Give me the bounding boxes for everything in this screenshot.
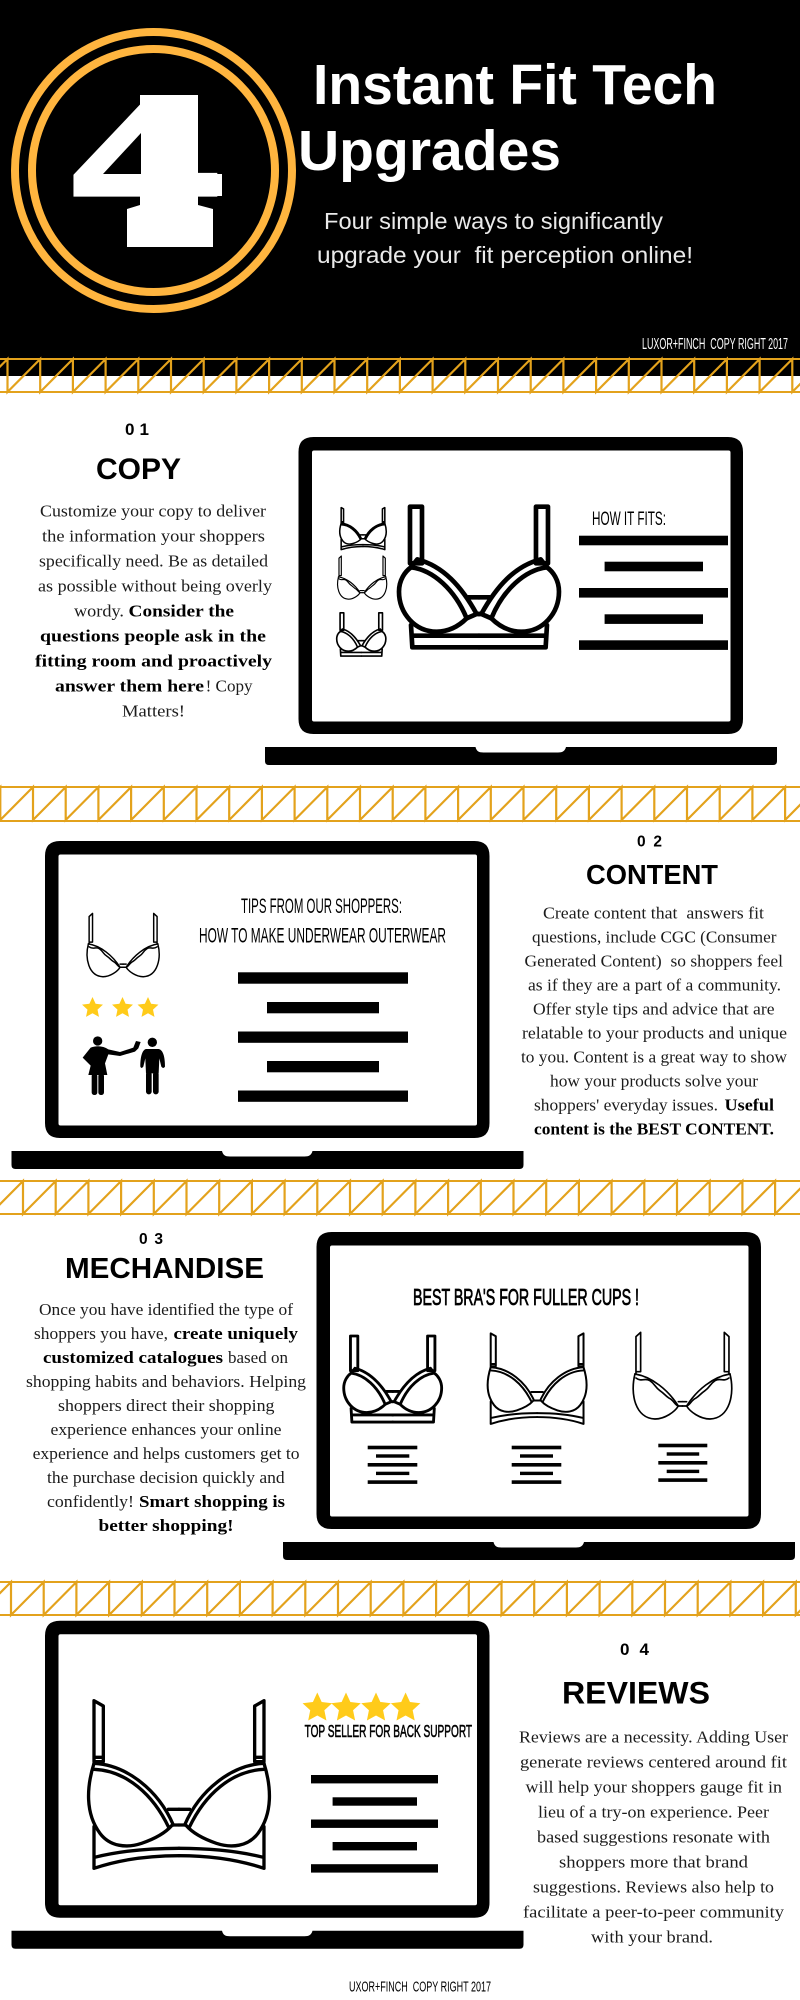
double ring badge with number 4: 4	[74, 61, 214, 255]
body copy: ! Copy	[206, 677, 253, 696]
section number: 0 2	[637, 834, 662, 851]
body copy: how your products solve your	[550, 1071, 758, 1090]
screen heading: TIPS FROM OUR SHOPPERS:	[241, 895, 402, 918]
body copy: the information your shoppers	[42, 527, 265, 546]
body copy: shoppers more that brand	[559, 1853, 749, 1872]
body copy: lieu of a try-on experience. Peer	[538, 1803, 769, 1822]
body copy: generate reviews centered around fit	[520, 1753, 787, 1772]
screen heading: BEST BRA'S FOR FULLER CUPS !	[413, 1284, 639, 1310]
body copy: to you. Content is a great way to show	[521, 1047, 788, 1066]
body copy: Create content that answers fit	[543, 903, 764, 922]
lace bra icon	[87, 913, 159, 977]
placeholder text lines	[311, 1775, 438, 1873]
double ring badge with number 4	[15, 32, 292, 309]
product 3 text lines	[658, 1444, 707, 1482]
subtitle	[317, 208, 693, 268]
body copy	[26, 1300, 307, 1535]
body copy: answer them here	[55, 677, 205, 696]
body copy	[35, 502, 273, 721]
section heading: COPY	[96, 453, 181, 486]
body copy	[519, 1728, 788, 1947]
body copy: Customize your copy to deliver	[40, 502, 266, 521]
product 1 bra	[344, 1336, 442, 1422]
body copy: confidently!	[47, 1492, 134, 1511]
small bra thumbnails	[337, 508, 387, 656]
body copy: suggestions. Reviews also help to	[533, 1878, 774, 1897]
screen heading	[199, 895, 446, 948]
body copy	[521, 903, 788, 1138]
main bra icon	[399, 507, 559, 647]
body copy: shopping habits and behaviors. Helping	[26, 1372, 307, 1391]
body copy: as if they are a part of a community.	[528, 975, 781, 994]
body copy: fitting room and proactively	[35, 652, 273, 671]
body copy: Consider the	[128, 602, 235, 621]
footer copyright: UXOR+FINCH COPY RIGHT 2017	[349, 1980, 491, 1996]
subtitle: upgrade your fit perception online!	[317, 242, 693, 268]
product 3 bra	[633, 1332, 732, 1419]
section 01: copy text	[35, 420, 273, 721]
body copy: Offer style tips and advice that are	[533, 999, 774, 1018]
title: Upgrades	[298, 119, 561, 183]
body copy: questions people ask in the	[40, 627, 267, 646]
body copy: the purchase decision quickly and	[47, 1468, 285, 1487]
laptop 4: reviews	[12, 1621, 524, 1949]
screen heading: HOW TO MAKE UNDERWEAR OUTERWEAR	[199, 925, 446, 948]
body copy: Useful	[724, 1095, 774, 1114]
section number: 0 3	[139, 1231, 163, 1248]
section 04: reviews text	[519, 1640, 788, 1947]
four stars	[303, 1692, 420, 1721]
section heading: CONTENT	[586, 859, 718, 890]
body copy: shoppers you have,	[34, 1324, 168, 1343]
product 2 bra	[488, 1333, 587, 1424]
three stars	[82, 997, 158, 1017]
body copy: create uniquely	[174, 1324, 299, 1343]
product 2 text lines	[512, 1446, 561, 1484]
laptop 2: shopper tips	[12, 841, 524, 1169]
body copy: content is the BEST CONTENT.	[534, 1119, 774, 1138]
body copy: Smart shopping is	[139, 1492, 285, 1511]
how it fits label: HOW IT FITS:	[592, 508, 666, 530]
section heading: MECHANDISE	[65, 1253, 264, 1285]
body copy: shoppers' everyday issues.	[534, 1095, 718, 1114]
placeholder text lines	[238, 972, 408, 1102]
zigzag divider 4	[0, 1581, 800, 1616]
body copy: wordy.	[74, 602, 124, 621]
header banner	[0, 0, 800, 376]
body copy: as possible without being overly	[38, 577, 273, 596]
zigzag divider 1	[0, 358, 800, 393]
body copy: will help your shoppers gauge fit in	[526, 1778, 783, 1797]
laptop 1: how it fits	[265, 437, 777, 765]
section 03: merchandise text	[26, 1231, 307, 1535]
body copy: better shopping!	[98, 1516, 234, 1535]
large bra icon	[89, 1701, 269, 1868]
body copy: Reviews are a necessity. Adding User	[519, 1728, 788, 1747]
body copy: customized catalogues	[43, 1348, 223, 1367]
section number: 0 4	[620, 1640, 650, 1659]
subtitle: Four simple ways to significantly	[324, 208, 663, 234]
section heading: REVIEWS	[562, 1674, 710, 1710]
product 1 text lines	[368, 1446, 417, 1484]
body copy: shoppers direct their shopping	[58, 1396, 275, 1415]
body copy: based on	[228, 1348, 288, 1367]
top seller label: TOP SELLER FOR BACK SUPPORT	[305, 1721, 472, 1741]
body copy: specifically need. Be as detailed	[39, 552, 269, 571]
body copy: with your brand.	[591, 1928, 713, 1947]
section number: 0 1	[125, 420, 149, 439]
body copy: experience and helps customers get to	[33, 1444, 300, 1463]
zigzag divider 3	[0, 1180, 800, 1215]
body copy: based suggestions resonate with	[537, 1828, 771, 1847]
title: Instant Fit Tech	[313, 53, 717, 117]
placeholder text lines	[579, 536, 728, 650]
section 02: content text	[521, 834, 788, 1138]
body copy: relatable to your products and unique	[522, 1023, 787, 1042]
body copy: questions, include CGC (Consumer	[532, 927, 777, 946]
body copy: experience enhances your online	[50, 1420, 282, 1439]
body copy: Matters!	[122, 702, 185, 721]
laptop 3: catalogue	[283, 1232, 795, 1560]
people icon: woman photographing man	[83, 1036, 165, 1095]
title	[298, 53, 717, 183]
body copy: Once you have identified the type of	[39, 1300, 293, 1319]
zigzag divider 2	[0, 786, 800, 822]
body copy: Generated Content) so shoppers feel	[524, 951, 783, 970]
body copy: facilitate a peer-to-peer community	[523, 1903, 785, 1922]
